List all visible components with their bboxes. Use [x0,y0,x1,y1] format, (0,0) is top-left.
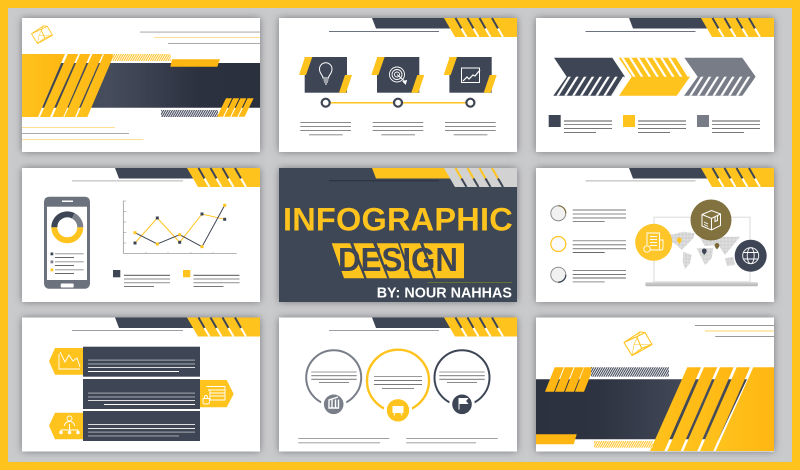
list item two [551,236,626,253]
panel: chevron process slide [536,18,774,152]
chart legend [113,270,240,287]
top decorative lines [695,325,774,337]
icon: light bulb [320,63,332,84]
legend item yellow [623,115,686,133]
lower decorative lines [22,127,144,140]
circle: yellow [367,350,429,423]
subtitle: design: DESIGN [338,241,458,278]
list item one [551,206,626,222]
icon: wireframe cube [32,26,52,44]
line chart [123,201,237,253]
text lines [300,122,496,135]
header underline [72,330,183,331]
divider [428,281,512,284]
phone [44,197,90,289]
circle: dark [434,350,490,416]
badge: document [635,224,672,261]
yellow bar [536,434,577,444]
header band [629,168,774,187]
panel: cover slide top left [22,18,260,152]
panel: timeline slide [279,18,517,152]
icon: line chart [59,352,80,369]
badge: package [690,200,732,240]
header band [372,168,517,187]
panel: three circles slide [279,318,517,452]
donut chart [54,214,80,240]
yellow chevron [618,58,690,96]
icon: chart [462,68,480,82]
timeline [322,99,474,107]
yellow slanted stripes [650,367,774,451]
phone legend [50,252,84,274]
icon: wireframe cube [624,332,652,356]
panel: phone and line chart slide [22,168,260,302]
row two with document tag [83,379,234,409]
legend item grey [697,115,760,133]
dark band [536,379,747,439]
header band [115,168,260,187]
laptop [645,217,758,286]
panel: center title slide [279,168,517,302]
header underline [329,180,439,181]
panel: closing slide bottom right [536,318,774,452]
icon: organisation [60,416,79,434]
icon: target [390,67,406,84]
yellow slanted stripes [22,54,114,117]
bottom text lines [298,438,498,443]
header underline [586,31,696,32]
circle: grey [306,350,361,416]
world map [663,232,740,269]
top decorative lines [140,31,260,44]
header underline [586,180,696,182]
header band [372,318,517,336]
small yellow stripes [217,98,254,117]
card: idea [299,57,352,93]
header underline [72,180,183,182]
hatch strips [113,54,218,117]
panel: stacked bars slide [22,318,260,452]
header band [115,318,260,336]
card: target [371,57,424,93]
legend item dark [549,115,612,133]
badge: globe [735,240,767,272]
map pins [677,238,719,255]
grey chevron [684,58,756,96]
header band [629,18,774,37]
hatch strips [591,367,669,448]
panel: world map slide [536,168,774,302]
design label stripes [332,243,464,278]
dark band [42,63,260,108]
header underline [329,330,439,331]
small yellow stripes [545,367,594,392]
byline: BY: NOUR NAHHAS [377,285,512,301]
title: INFOGRAPHIC [283,202,513,238]
yellow bar [170,59,220,67]
dark chevron [553,58,625,96]
list item three [551,267,626,282]
header underline [329,31,439,32]
icon: form [203,386,225,404]
card: growth chart [444,57,497,93]
row one with chart tag [49,347,200,377]
header band [372,18,517,37]
row three with org chart tag [49,411,200,441]
